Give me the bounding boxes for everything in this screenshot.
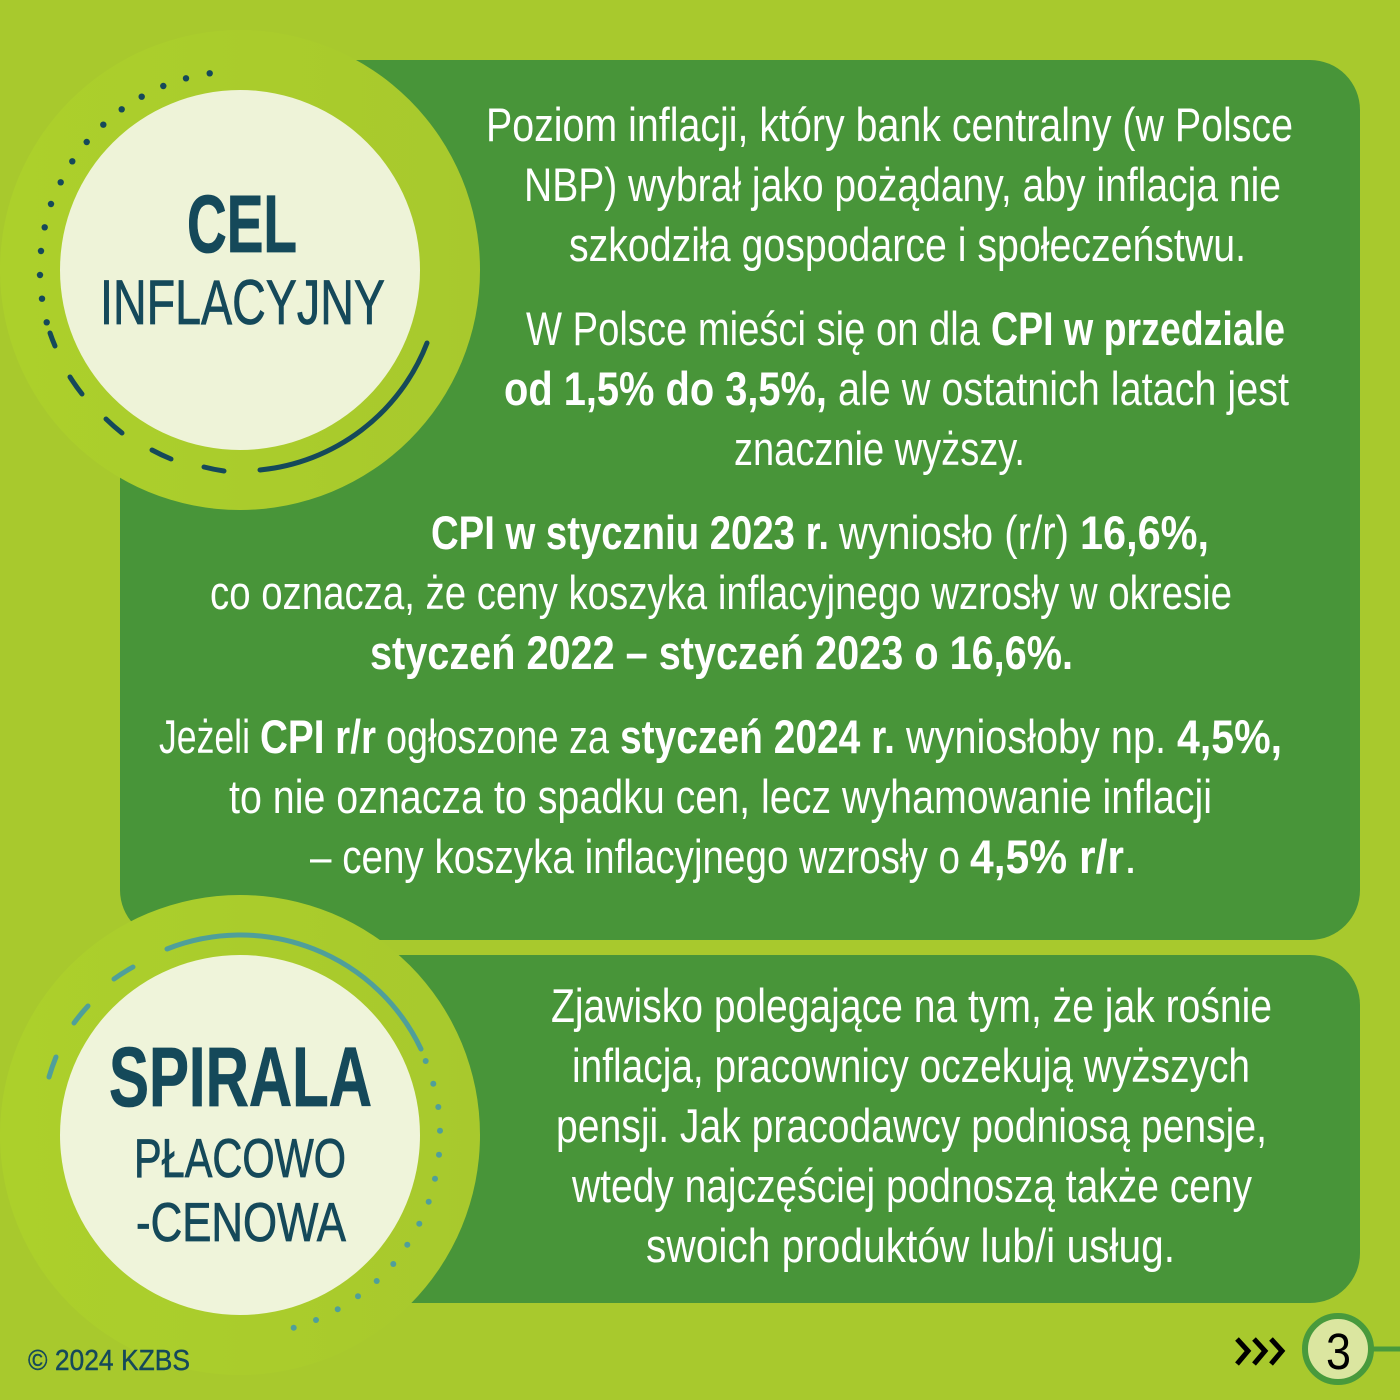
text block: CPI January 2024 example: ogłoszone za xyxy=(386,710,610,763)
text block: target range in Poland: W Polsce mieści się on dla xyxy=(526,302,981,355)
text block: CPI January 2024 example xyxy=(159,710,1282,883)
panel: cel inflacyjny background xyxy=(120,60,1360,940)
text block: CPI January 2024 example: – ceny koszyka inflacyjnego wzrosły o xyxy=(310,830,960,883)
heading: -CENOWA: -CENOWA xyxy=(136,1191,346,1253)
text block: CPI January 2024 example: to nie oznacza to spadku cen, lecz wyhamowanie inflacji xyxy=(229,770,1212,823)
text block: CPI January 2024 example: 4,5% r/r xyxy=(970,830,1124,883)
text block: target range in Poland: znacznie wyższy. xyxy=(734,422,1025,475)
text block: wage-price spiral definition xyxy=(551,979,1272,1272)
panel: spirala background xyxy=(120,955,1360,1303)
text block: CPI January 2023 xyxy=(210,506,1232,679)
decorative ring: teal arc, dashes and dots xyxy=(49,935,443,1331)
text block: CPI January 2024 example: CPI r/r xyxy=(260,710,376,763)
text block: wage-price spiral definition: inflacja, pracownicy oczekują wyższych xyxy=(572,1039,1250,1092)
decorative ring: dots and dashes xyxy=(37,70,427,471)
copyright: © 2024 KZBS xyxy=(28,1345,190,1377)
page number badge xyxy=(1305,1316,1400,1382)
text block: CPI January 2024 example: Jeżeli xyxy=(159,710,250,763)
text block: CPI January 2024 example: . xyxy=(1124,830,1137,883)
heading: CEL: CEL xyxy=(187,179,297,270)
text block: target range in Poland: ale w ostatnich latach jest xyxy=(838,362,1289,415)
text block: CPI January 2024 example: styczeń 2024 r. xyxy=(620,710,895,763)
text block: wage-price spiral definition: Zjawisko polegające na tym, że jak rośnie xyxy=(551,979,1272,1032)
icon: chevrons arrow xyxy=(1237,1339,1282,1364)
text block: target range in Poland xyxy=(504,302,1289,475)
text block: definition xyxy=(486,98,1293,271)
heading: PŁACOWO: PŁACOWO xyxy=(134,1127,346,1189)
heading: SPIRALA: SPIRALA xyxy=(109,1030,372,1124)
badge: cel inflacyjny circle xyxy=(0,30,480,510)
text block: CPI January 2023: styczeń 2022 – styczeń 2023 o 16,6%. xyxy=(370,626,1073,679)
text block: wage-price spiral definition: wtedy najczęściej podnoszą także ceny xyxy=(571,1159,1252,1212)
text block: wage-price spiral definition: pensji. Jak pracodawcy podniosą pensje, xyxy=(556,1099,1267,1152)
text block: wage-price spiral definition: swoich produktów lub/i usług. xyxy=(646,1219,1175,1272)
heading: INFLACYJNY: INFLACYJNY xyxy=(100,268,385,338)
text block: definition: szkodziła gospodarce i społeczeństwu. xyxy=(569,218,1246,271)
page number badge: 3 xyxy=(1326,1323,1351,1380)
text block: target range in Poland: od 1,5% do 3,5%, xyxy=(504,362,827,415)
text block: CPI January 2023: CPI w styczniu 2023 r. xyxy=(431,506,829,559)
text block: target range in Poland: CPI w przedziale xyxy=(991,302,1285,355)
text block: CPI January 2023: wyniosło (r/r) xyxy=(838,506,1069,559)
text block: CPI January 2023: 16,6%, xyxy=(1080,506,1209,559)
text block: CPI January 2024 example: 4,5%, xyxy=(1177,710,1282,763)
text block: CPI January 2024 example: wyniosłoby np. xyxy=(905,710,1166,763)
badge: spirala circle xyxy=(0,895,480,1375)
